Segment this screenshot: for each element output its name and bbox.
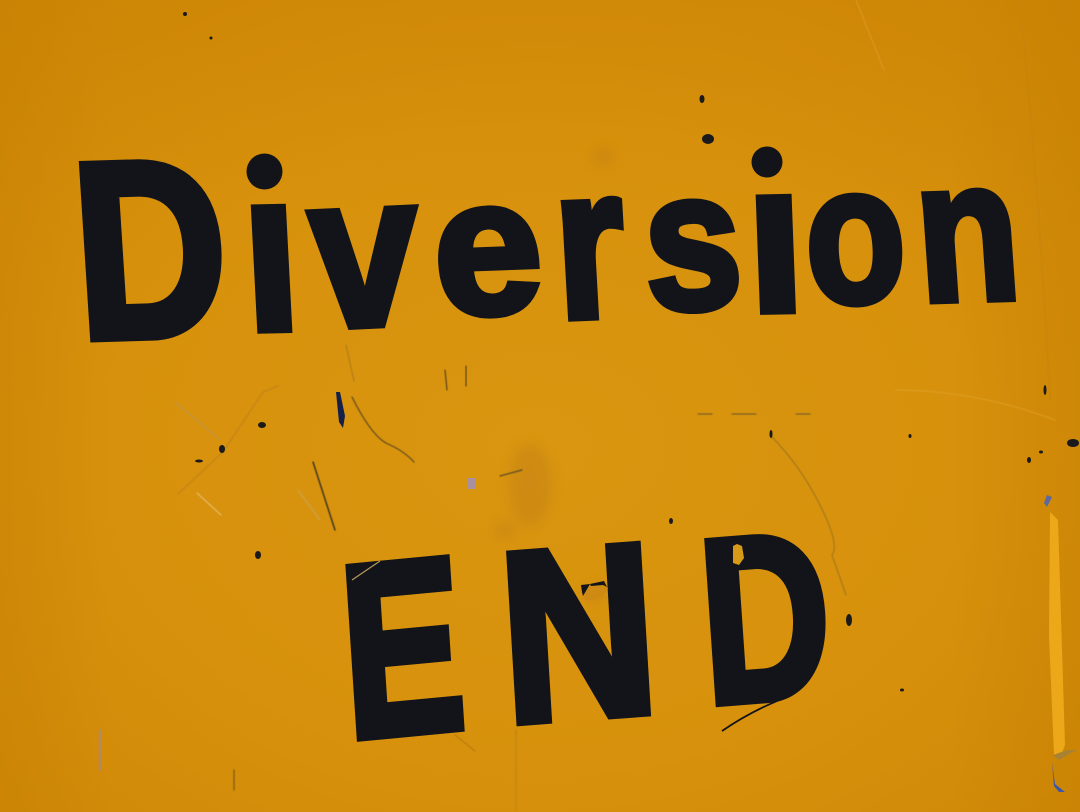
letter o: o (801, 124, 909, 346)
letter n: n (908, 118, 1026, 344)
scratch under D (722, 695, 792, 731)
word: END (334, 482, 838, 790)
letter i (246, 154, 292, 334)
paint damage on END letters (352, 544, 744, 601)
letter r: r (548, 121, 630, 364)
letter D: D (693, 482, 838, 753)
letter N: N (493, 492, 664, 774)
letter v: v (305, 128, 422, 374)
letter e: e (428, 138, 547, 357)
letter i: i (236, 118, 305, 380)
dark specks (183, 12, 1079, 692)
letter s: s (639, 130, 746, 352)
rust patches (493, 148, 614, 602)
letter i: i (742, 114, 808, 357)
pale chip (467, 478, 476, 489)
bright strip at right edge (1044, 495, 1077, 792)
word: Diversion (78, 146, 1016, 342)
letter E: E (334, 505, 471, 790)
letter i (752, 146, 796, 315)
letter D: D (66, 108, 235, 391)
